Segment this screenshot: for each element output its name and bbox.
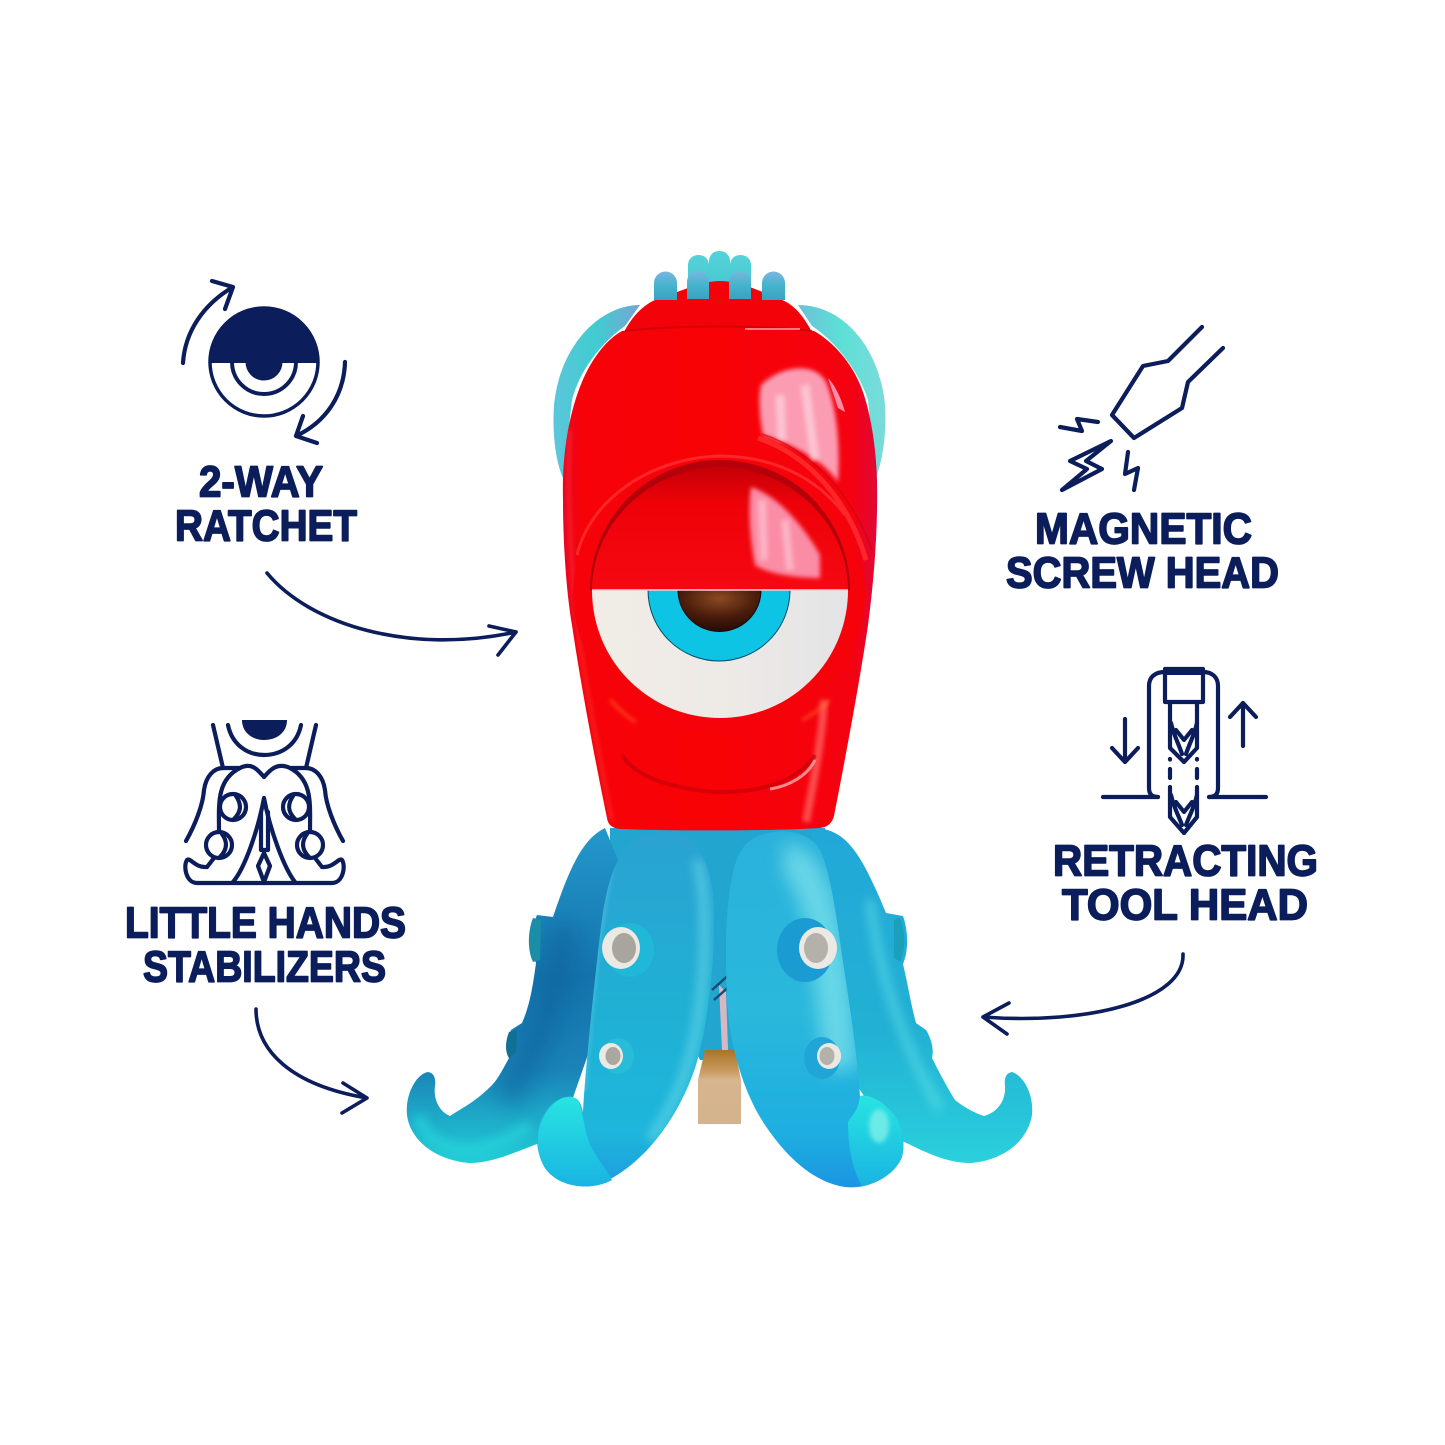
dome seam — [625, 326, 812, 331]
heading: retracting tool head — [1053, 836, 1318, 930]
back left tentacle — [407, 828, 618, 1163]
arrow: retracting head to tentacles — [983, 954, 1183, 1034]
heading: little hands stabilizers — [125, 898, 406, 992]
back right tentacle — [800, 828, 1032, 1163]
eyelid highlight — [750, 487, 820, 578]
highlight on head — [760, 368, 839, 482]
product: octopus screwdriver — [407, 251, 1032, 1187]
iris — [648, 590, 790, 661]
icon: magnetic screwdriver tip with sparks — [1060, 327, 1223, 490]
red head — [563, 281, 877, 830]
head dome — [622, 281, 814, 336]
feature: little hands stabilizers — [125, 720, 406, 992]
heading: retracting tool head: RETRACTING — [1053, 836, 1318, 886]
pupil — [678, 590, 761, 631]
heading: magnetic screw head: MAGNETIC — [1035, 504, 1252, 554]
heading: magnetic screw head: SCREW HEAD — [1006, 548, 1279, 598]
heading: 2-way ratchet: RATCHET — [175, 502, 357, 550]
heading: little hands stabilizers: LITTLE HANDS — [125, 898, 406, 948]
eye socket shadow — [590, 460, 850, 590]
infographic canvas — [126, 251, 1316, 1188]
eye white — [592, 590, 848, 718]
heading: magnetic screw head — [1006, 504, 1279, 598]
head shading — [569, 430, 612, 820]
tool post — [698, 1050, 741, 1124]
icon: little hands stabilizers — [185, 720, 344, 883]
feature: retracting tool head — [1053, 667, 1318, 930]
front right tentacle — [726, 831, 903, 1187]
lid edge — [592, 589, 848, 591]
feature: magnetic screw head — [1006, 327, 1279, 598]
icon: ratchet eye with rotation arrows — [183, 281, 345, 443]
arrow: stabilizers to tentacles — [256, 1009, 367, 1113]
heading: little hands stabilizers: STABILIZERS — [143, 942, 386, 992]
smile — [622, 755, 815, 792]
handles: teal side loops — [553, 305, 885, 478]
front left tentacle — [537, 831, 714, 1186]
eye ring — [573, 454, 865, 734]
arrow: ratchet to head — [267, 573, 516, 655]
inner column between tentacles — [610, 828, 835, 1060]
heading: 2-way ratchet: 2-WAY — [199, 458, 323, 506]
eyelid — [592, 467, 848, 590]
feature: 2-way ratchet — [175, 281, 357, 550]
icon: retracting tool head — [1103, 667, 1266, 833]
suction cups — [599, 918, 841, 1079]
head body — [563, 327, 877, 830]
back top fingers — [688, 251, 751, 301]
front top fingers — [654, 271, 785, 300]
heading: 2-way ratchet — [175, 458, 357, 550]
heading: retracting tool head: TOOL HEAD — [1062, 880, 1308, 930]
tentacles: octopus lower body — [407, 828, 1032, 1187]
